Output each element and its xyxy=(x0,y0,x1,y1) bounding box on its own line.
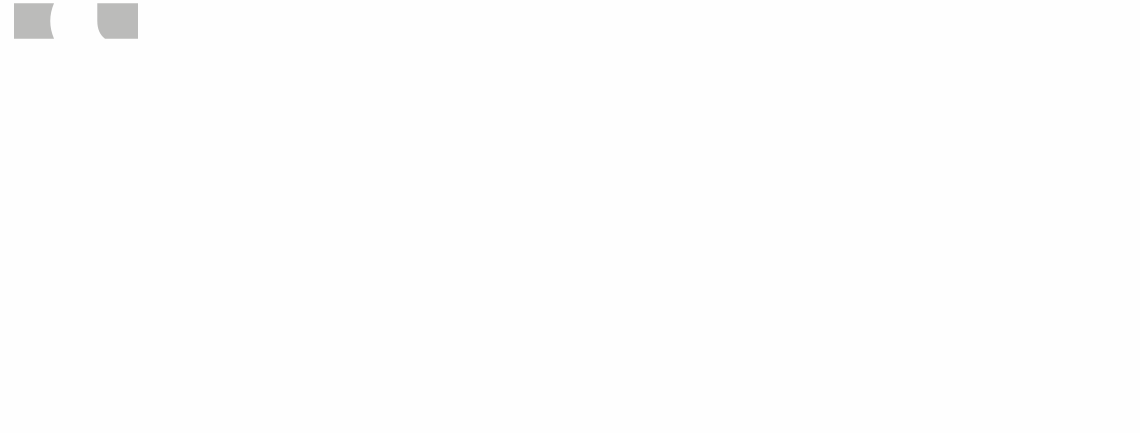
grey tile with rounded bottom-left corner xyxy=(97,3,138,39)
grey tile with concave right edge xyxy=(14,3,54,39)
